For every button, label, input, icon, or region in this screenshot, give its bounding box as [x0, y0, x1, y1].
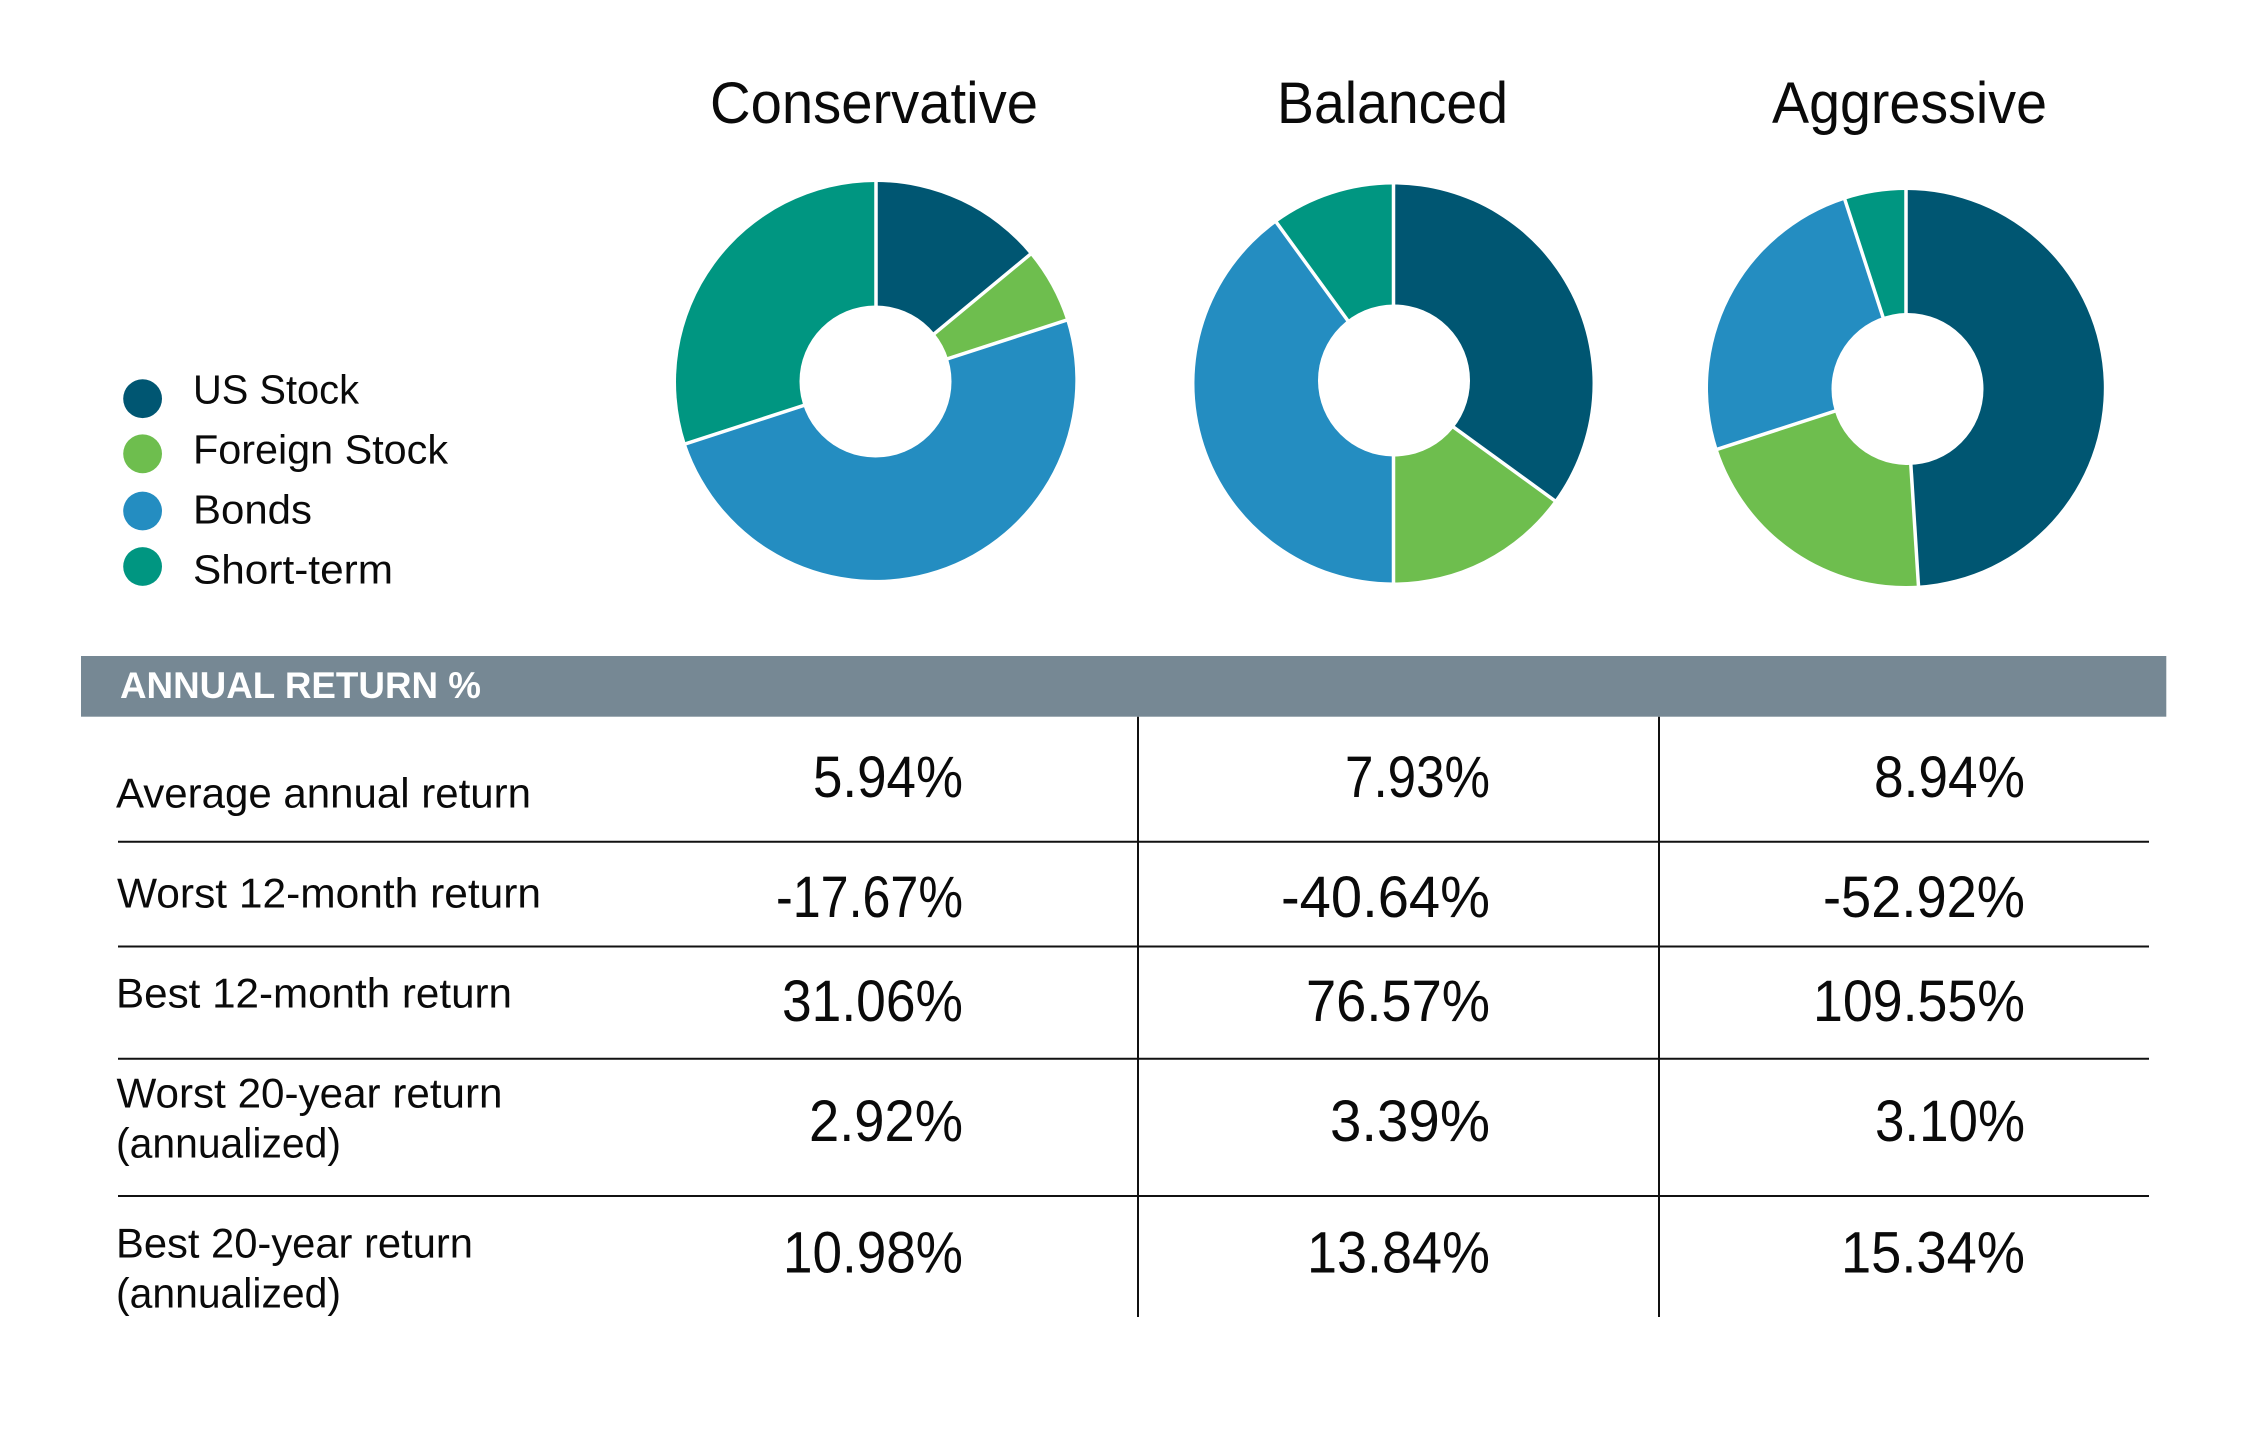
donut chart: Aggressive — [1708, 183, 2104, 593]
table row: Best 20-year return: (annualized) — [116, 1270, 341, 1316]
table row: Best 20-year return: 10.98% — [783, 1221, 963, 1286]
table row: Average annual return: Average annual return — [116, 770, 531, 816]
table row: Worst 12-month return — [117, 865, 2025, 930]
table row: Best 12-month return — [116, 969, 2025, 1034]
table row: Average annual return: 7.93% — [1345, 745, 1490, 810]
heading: Balanced: Balanced — [1277, 71, 1508, 136]
legend item: Short-term: Short-term — [193, 546, 393, 592]
legend item: US Stock — [123, 366, 359, 418]
table row: Best 20-year return: 13.84% — [1307, 1221, 1490, 1286]
table row: Worst 20-year return: (annualized) — [116, 1120, 341, 1166]
legend item: Bonds: Bonds — [193, 486, 312, 532]
table row: Worst 12-month return: -40.64% — [1281, 865, 1490, 930]
header bar: annual return: ANNUAL RETURN % — [120, 665, 481, 706]
table row: Worst 20-year return — [116, 1070, 2025, 1166]
table row: Worst 20-year return: Worst 20-year return — [116, 1070, 502, 1116]
table row: Best 12-month return: 31.06% — [782, 969, 963, 1034]
donut chart: Balanced — [1194, 178, 1593, 588]
table row: Worst 12-month return: Worst 12-month return — [117, 870, 541, 916]
legend — [123, 366, 448, 592]
table row: Average annual return: 5.94% — [813, 745, 963, 810]
table row: Best 12-month return: 109.55% — [1813, 969, 2025, 1034]
table row: Best 20-year return — [116, 1220, 2025, 1316]
table row: Worst 12-month return: -52.92% — [1823, 865, 2025, 930]
legend item: Bonds — [123, 486, 312, 532]
legend item: US Stock: US Stock — [193, 366, 359, 412]
table row: Average annual return — [116, 745, 2025, 816]
table row: Best 12-month return: 76.57% — [1306, 969, 1490, 1034]
table row: Best 20-year return: 15.34% — [1841, 1221, 2025, 1286]
table row: Worst 20-year return: 2.92% — [809, 1089, 963, 1154]
table row: Best 12-month return: Best 12-month return — [116, 970, 512, 1016]
table row: Best 20-year return: Best 20-year return — [116, 1220, 473, 1266]
heading: Aggressive: Aggressive — [1772, 71, 2047, 136]
table row: Worst 12-month return: -17.67% — [776, 865, 963, 930]
heading: Conservative: Conservative — [710, 71, 1038, 136]
legend item: Foreign Stock: Foreign Stock — [193, 426, 448, 472]
header bar: annual return — [81, 656, 2166, 717]
table row: Average annual return: 8.94% — [1874, 745, 2025, 810]
table row: Worst 20-year return: 3.39% — [1330, 1089, 1490, 1154]
table row: Worst 20-year return: 3.10% — [1875, 1089, 2025, 1154]
donut chart: Conservative — [676, 177, 1075, 580]
